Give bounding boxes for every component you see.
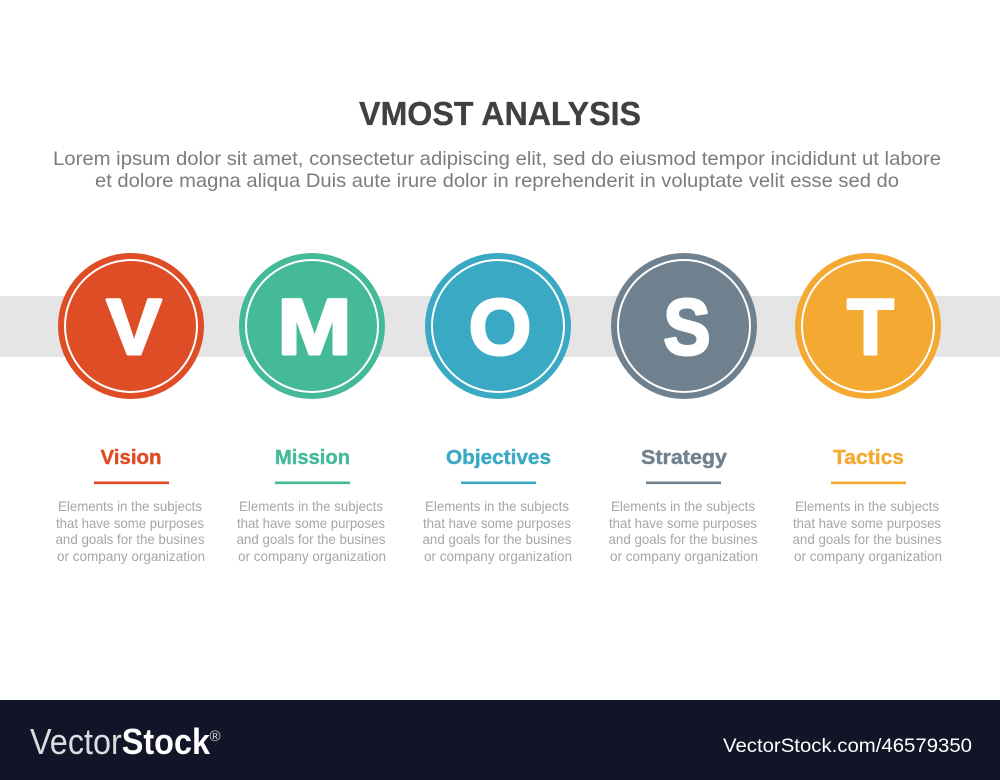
text: Tactics description: Elements in the subjects	[795, 498, 939, 514]
background band	[0, 296, 1000, 357]
column: Vision	[56, 447, 205, 564]
text: Objectives description: and goals for the busines	[422, 531, 572, 547]
circle: V: V	[106, 282, 162, 371]
text: Objectives description: or company organization	[424, 548, 572, 564]
text: Strategy description: Elements in the subjects	[611, 498, 755, 514]
text: Mission description: that have some purposes	[237, 515, 385, 531]
text: Tactics description: that have some purposes	[793, 515, 941, 531]
circle: S: S	[664, 282, 710, 371]
subtitle: Lorem ipsum dolor sit amet, consectetur adipiscing elit, sed do eiusmod tempor incididunt ut labore	[53, 148, 941, 170]
text: Mission description: Elements in the subjects	[239, 498, 383, 514]
text: Strategy description	[608, 498, 758, 564]
underline: Strategy	[646, 482, 721, 484]
underline: Mission	[275, 482, 350, 484]
circle: T: T	[847, 282, 894, 371]
text: Strategy description: and goals for the busines	[608, 531, 758, 547]
text: Tactics description: or company organization	[794, 548, 942, 564]
underline: Tactics	[831, 482, 906, 484]
column: Objectives	[422, 447, 572, 564]
heading: Mission: Mission	[275, 447, 350, 469]
subtitle	[53, 148, 941, 192]
heading: Tactics: Tactics	[833, 447, 904, 469]
circle: O: O	[469, 282, 531, 371]
circle: O	[425, 253, 571, 399]
column: Mission	[236, 447, 386, 564]
text: Tactics description	[792, 498, 942, 564]
column: Tactics	[792, 447, 942, 564]
title: VMOST ANALYSIS	[359, 95, 641, 132]
text: Strategy description: that have some purposes	[609, 515, 757, 531]
footer id: VectorStock.com/46579350	[723, 735, 972, 757]
underline: Vision	[94, 482, 169, 484]
circle: V	[58, 253, 204, 399]
circle: T	[795, 253, 941, 399]
heading: Objectives: Objectives	[446, 447, 551, 469]
underline: Objectives	[461, 482, 536, 484]
registered mark: ®	[210, 728, 221, 745]
subtitle: et dolore magna aliqua Duis aute irure dolor in reprehenderit in voluptate velit esse sed do	[95, 170, 899, 192]
text: Objectives description	[422, 498, 572, 564]
text: Vision description: and goals for the busines	[56, 531, 204, 547]
heading: Strategy: Strategy	[641, 447, 728, 469]
text: Tactics description: and goals for the busines	[792, 531, 942, 547]
text: Objectives description: that have some purposes	[423, 515, 571, 531]
heading: Vision: Vision	[100, 447, 162, 469]
text: Vision description	[56, 498, 205, 564]
text: Objectives description: Elements in the subjects	[425, 498, 569, 514]
column: Strategy	[608, 447, 758, 564]
text: Vision description: or company organization	[57, 548, 205, 564]
text: Mission description	[236, 498, 386, 564]
circle: S	[611, 253, 757, 399]
text: Strategy description: or company organization	[610, 548, 758, 564]
text: Mission description: and goals for the busines	[236, 531, 386, 547]
text: Mission description: or company organization	[238, 548, 386, 564]
circle: M	[239, 253, 385, 399]
text: Vision description: that have some purposes	[56, 515, 204, 531]
circle: M: M	[278, 282, 352, 371]
footer bar	[0, 700, 1000, 780]
text: Vision description: Elements in the subjects	[58, 498, 202, 514]
footer logo: VectorStock	[30, 721, 211, 762]
